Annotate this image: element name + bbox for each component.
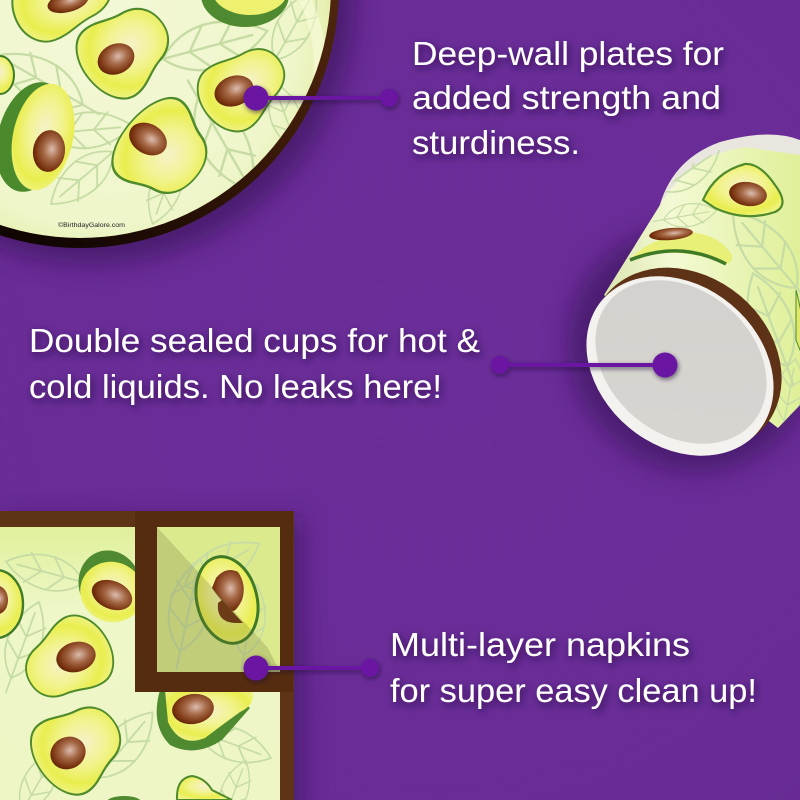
- avocado: lower left: [0, 74, 84, 200]
- plate pattern: [0, 0, 330, 229]
- text: napkins: Multi-layer napkins: [390, 626, 690, 663]
- panel: plate: [0, 0, 354, 264]
- cup rim: [658, 134, 800, 212]
- callout: plates: [244, 86, 398, 110]
- avocado: top left: [11, 0, 110, 43]
- cup body: [604, 147, 800, 428]
- text: cups: Double sealed cups for hot &: [29, 322, 480, 359]
- cup base: [550, 239, 800, 493]
- panel: cup: [560, 134, 800, 480]
- avocado: left edge: [0, 56, 14, 94]
- cup pattern: [652, 150, 800, 422]
- napkin avocado: left edge: [0, 570, 23, 638]
- text: plates: sturdiness.: [412, 124, 580, 161]
- napkin pattern: [0, 545, 276, 800]
- cup callout line: [500, 363, 665, 367]
- cup callout dot large: [652, 352, 678, 378]
- callout: napkins: [244, 656, 379, 680]
- napkin avocado: bottom edge: [106, 796, 142, 800]
- text: napkins: [390, 626, 757, 709]
- cup callout dot small: [491, 356, 509, 374]
- text: napkins: for super easy clean up!: [390, 672, 757, 709]
- text: plates: added strength and: [412, 79, 721, 116]
- avocado: under callout: [185, 31, 301, 143]
- avocado: lower centre: [99, 85, 227, 215]
- avocado: upper middle: [63, 0, 187, 111]
- napkin avocado: lower: [18, 687, 138, 800]
- fold pattern: [168, 540, 267, 670]
- text: plates: [412, 35, 724, 161]
- cup base inner: [563, 246, 799, 478]
- folded corner: [135, 511, 293, 692]
- napkin avocado: right: [157, 690, 253, 750]
- fold border: [135, 511, 293, 692]
- avocado: top edge: [201, 0, 289, 27]
- text: cups: [29, 322, 480, 405]
- napkin avocado: centre: [11, 605, 125, 715]
- napkin avocado: behind fold: [78, 550, 135, 622]
- napkin avocado: bottom: [177, 776, 232, 800]
- plate rim: [0, 0, 339, 248]
- cup avocado: upper: [703, 164, 782, 216]
- napkin callout line: [256, 666, 369, 670]
- napkin surface: [0, 527, 280, 800]
- panel: napkin: [0, 511, 302, 800]
- cup brown band: [553, 229, 800, 491]
- callout: cups: [491, 352, 678, 378]
- text: cups: cold liquids. No leaks here!: [29, 368, 442, 405]
- plate callout line: [256, 96, 389, 100]
- napkin callout dot large: [244, 656, 268, 680]
- fold avocado: [187, 550, 267, 650]
- plate callout dot small: [380, 89, 398, 107]
- plate surface: [0, 0, 331, 238]
- napkin callout dot small: [361, 659, 379, 677]
- fold surface: [157, 527, 280, 672]
- copyright text: ©BirthdayGalore.com: [58, 221, 125, 229]
- plate callout dot large: [244, 86, 268, 110]
- text: plates: Deep-wall plates for: [412, 35, 724, 72]
- cup avocado: lower: [630, 226, 732, 264]
- napkin border: [0, 511, 294, 800]
- fold shade: [157, 527, 280, 672]
